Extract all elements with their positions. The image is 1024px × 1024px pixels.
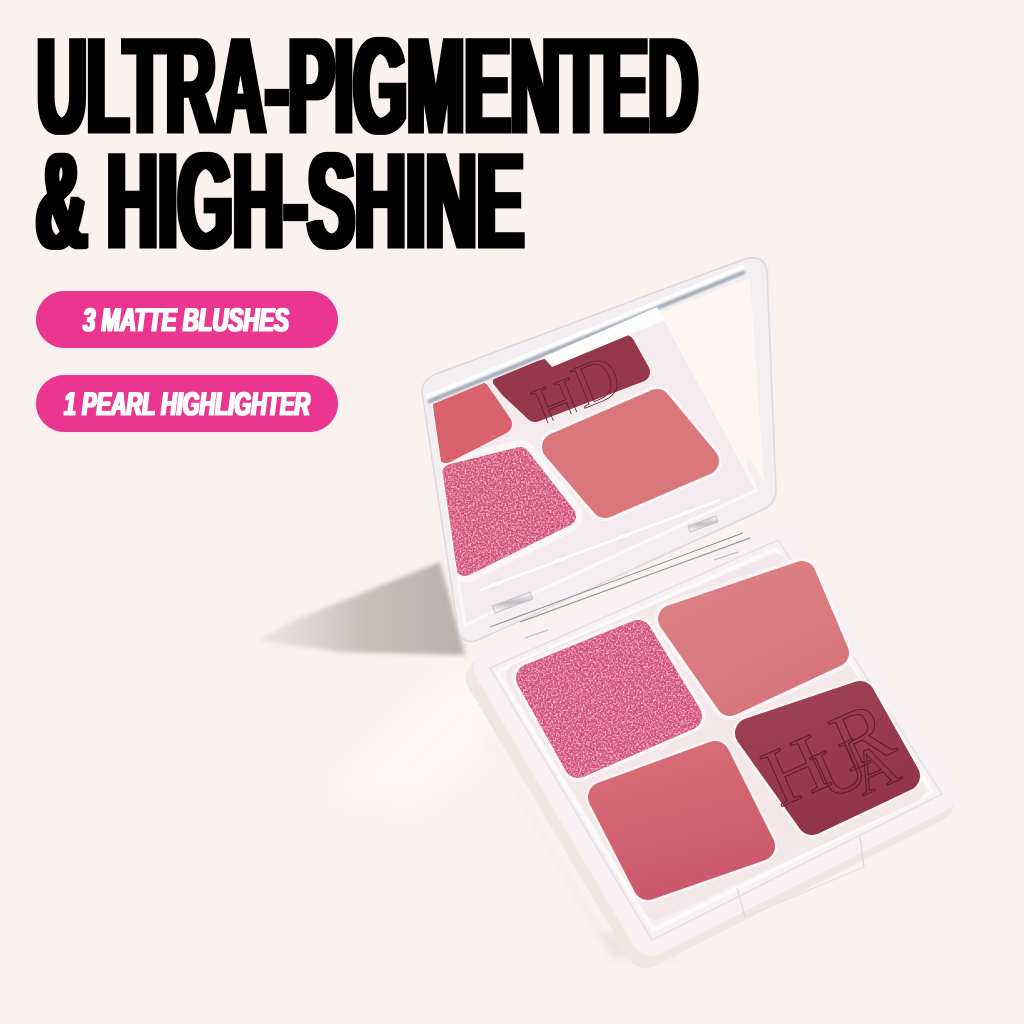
white tab <box>543 307 665 367</box>
reflected logo: D <box>563 342 630 421</box>
lid body <box>435 271 762 628</box>
reflected pans <box>443 342 705 566</box>
palette base <box>486 538 942 948</box>
badge: 1 pearl highlighter: 1 PEARL HIGHLIGHTER <box>64 386 310 422</box>
badge: 1 pearl highlighter <box>36 375 338 432</box>
embossed logo: R <box>818 682 906 789</box>
badge: 3 matte blushes: 3 MATTE BLUSHES <box>83 302 289 338</box>
reflected tray <box>432 310 757 625</box>
base side edge <box>486 552 934 948</box>
reflected light pan <box>556 403 705 504</box>
palette lid with mirror <box>422 258 776 642</box>
pan: pearl highlighter <box>530 634 688 764</box>
embossed logo <box>748 682 916 842</box>
embossed logo: A <box>841 729 909 809</box>
pan: deep berry blush <box>750 696 905 820</box>
hinge strip <box>520 538 750 638</box>
tray recess <box>518 566 913 908</box>
reflected logo: H <box>523 364 590 444</box>
cast shadows and light <box>258 562 680 960</box>
pan: coral blush <box>603 756 760 885</box>
front clasp <box>737 837 864 917</box>
reflected logo <box>530 360 618 424</box>
reflected coral pan <box>443 392 502 453</box>
rim line <box>490 540 942 940</box>
lid top band <box>428 270 745 402</box>
title <box>36 10 698 278</box>
embossed logo: U <box>802 724 879 815</box>
pan wells <box>530 575 905 885</box>
reflected dark pan <box>503 342 640 444</box>
reflected wells <box>452 403 705 566</box>
embossed logo: H <box>750 716 842 824</box>
base body <box>494 544 938 936</box>
title: & HIGH-SHINE <box>36 125 524 278</box>
mirror area <box>660 278 764 482</box>
pan: light rose blush <box>672 575 835 702</box>
reflected shimmer pan <box>452 457 566 566</box>
hinge details <box>480 500 743 627</box>
badge: 3 matte blushes <box>36 291 338 348</box>
lid outer edge <box>422 258 776 642</box>
